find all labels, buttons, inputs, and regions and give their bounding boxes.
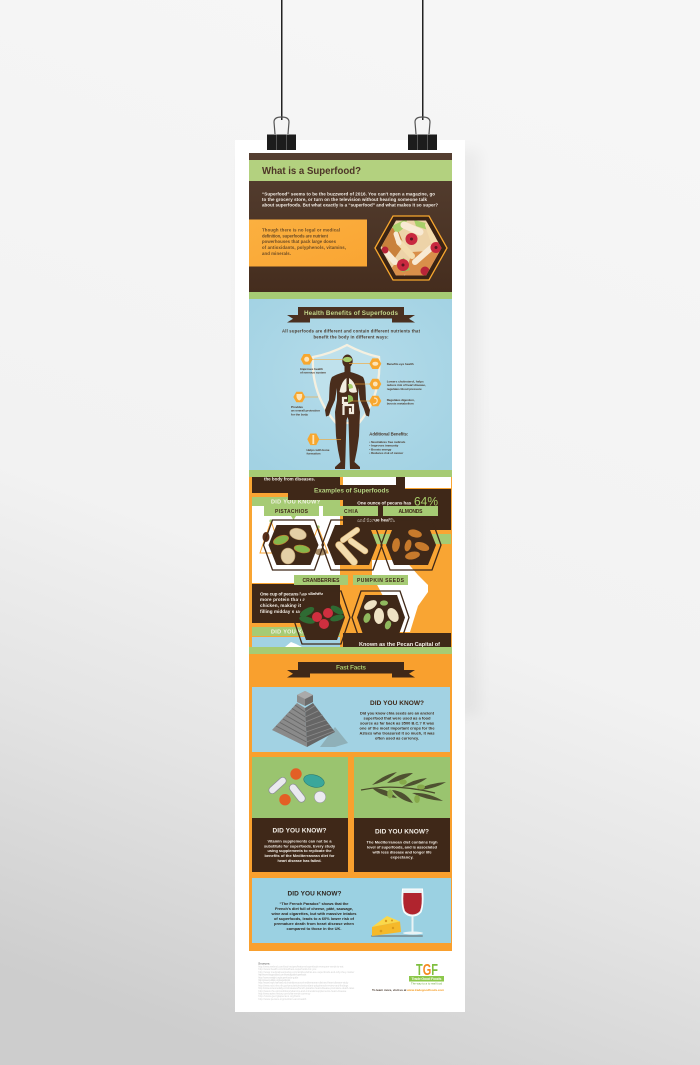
sources list: http://www.sciencedaily.com/releases/french-paradox-heart-disease-premature-death-rates: [258, 987, 355, 990]
card: mediterranean text: DID YOU KNOW?: [375, 828, 429, 836]
fact text: superfood that were used as a food: [364, 716, 431, 720]
binder clip left: [267, 117, 296, 150]
hanging wire left: [281, 0, 282, 120]
fact text: Aztecs who treasured it so much, it was: [360, 730, 434, 736]
card: mediterranean diet: [354, 757, 450, 818]
item: pistachios: [264, 506, 324, 570]
pecan facts text: One ounce of pecans has: [357, 500, 412, 506]
green did you know strips: [252, 497, 451, 647]
sources list: [258, 962, 355, 1001]
card: vitamin text: [252, 818, 348, 872]
brain: [343, 357, 352, 362]
section ribbon: Examples of Superfoods: [314, 488, 389, 494]
title band: [249, 160, 452, 181]
card: mediterranean text: with less disease and longer life: [372, 850, 432, 854]
sources list: http://www.medicalnewstoday.com/articles/what-are-superfoods-and-why-they-matter: [258, 971, 354, 974]
fact text: wine and cigarettes, but with massive intakes: [270, 911, 357, 916]
heading ribbon: Health Benefits of Superfoods: [304, 310, 398, 317]
pecan facts text: more protein than a: [260, 597, 305, 602]
card: vitamin text: heart disease has failed.: [278, 858, 322, 863]
sources list: http://www.eatright.org/superfoods-guide: [258, 976, 299, 979]
additional benefits list: [369, 432, 409, 455]
benefit: eye health: [349, 358, 414, 369]
intestines: [343, 398, 353, 415]
item: cranberries: CRANBERRIES: [302, 578, 340, 584]
additional benefits list: • Boosts energy: [369, 447, 392, 451]
card: chia seeds aztec: [252, 687, 450, 752]
panel: what is a superfood: [249, 153, 452, 292]
card: mediterranean text: [354, 818, 450, 872]
definition callout: Though there is no legal or medical: [262, 228, 340, 232]
card: vitamin text: benefits of the Mediterranean diet for: [264, 853, 335, 858]
logo: trade good foods: Trade Good Foods: [412, 977, 442, 981]
pecan capital block: [343, 633, 451, 648]
human body figure: [325, 354, 370, 469]
benefit: nervous system: [300, 354, 343, 374]
poster sheet: [235, 140, 465, 1012]
card: vitamin text: Vitamin supplements can not be a: [268, 838, 332, 844]
sources list: http://www.hsph.harvard.edu/nutritionsource/mediterranean-diet-and-heart-disease-study: [258, 982, 349, 985]
benefit: cholesterol: Lowers cholesterol, helps: [387, 380, 424, 384]
subheading: benefit the body in different ways:: [314, 334, 388, 340]
lungs: [340, 378, 357, 393]
item: pistachios: PISTACHIOS: [275, 509, 309, 515]
card: vitamin text: using supplements to replicate the: [268, 848, 332, 853]
fact text: compared to those in the UK.: [286, 926, 342, 931]
icon: wine glass and cheese: [371, 889, 423, 937]
benefit: nervous system: of nervous system: [300, 370, 326, 374]
panel: health benefits: [249, 299, 452, 470]
card: vitamin supplements: [252, 757, 348, 818]
card: vitamin text: substitute for superfoods. Every study: [264, 844, 336, 848]
fact text: often used as currency.: [375, 736, 419, 740]
logo: trade good foods: [409, 962, 444, 986]
sources list: http://www.pecans.org/nutrition-and-health: [258, 998, 307, 1001]
item: cranberries: [293, 575, 350, 644]
fact text: Did you know chia seeds are an ancient: [360, 710, 435, 716]
title band: What is a Superfood?: [262, 165, 361, 177]
additional benefits list: Additional Benefits:: [369, 432, 409, 436]
sources list: http://www.webmd.com/food-recipes/features/superfoods-everyone-needs-to-eat: [258, 966, 344, 968]
definition callout: definition, superfoods are nutrient: [262, 234, 329, 238]
panel: examples of superfoods: [249, 476, 452, 648]
scale illustration behind pistachios: [260, 519, 328, 556]
item: chia: [322, 506, 382, 570]
divider band green: [249, 292, 452, 299]
item: almonds: [381, 506, 441, 570]
sources list: http://www.ncbi.nlm.nih.gov/pmc/articles/antioxidant-polyphenols-review-and-findings: [258, 984, 349, 987]
benefit: nervous system: Improves health: [300, 367, 323, 371]
definition callout: powerhouses that pack large doses: [262, 239, 337, 244]
item: almonds: ALMONDS: [398, 509, 423, 515]
divider band green: [249, 647, 452, 654]
pecan facts text: One cup of pecans has slightly: [260, 592, 323, 596]
pecan facts text: 64%: [414, 494, 438, 508]
benefit: overall protection: [291, 392, 320, 416]
definition callout: of antioxidants, polyphenols, vitamins,: [262, 245, 346, 250]
fact text: French's diet full of cheese, pâté, sausage,: [275, 906, 353, 911]
fact text: “The French Paradox” shows that the: [280, 901, 349, 906]
shield outline: [313, 345, 379, 423]
divider band green: [249, 470, 452, 477]
intro text: about superfoods. But what exactly is a “superfood” and what makes it so super?: [262, 202, 438, 208]
sources list: http://www.nhs.uk/conditions/vitamins-and-minerals/supplements-heart-disease: [258, 990, 347, 993]
benefit: overall protection: for the body: [291, 412, 308, 416]
item: chia: CHIA: [344, 509, 358, 515]
fact text: [360, 700, 435, 740]
pecan facts text: [260, 494, 438, 614]
pecan facts text: chicken, making it a: [260, 603, 305, 608]
benefit: digestion: boosts metabolism: [387, 402, 414, 406]
heading ribbon: [287, 662, 415, 678]
green did you know strips: DID YOU KNOW?: [271, 630, 321, 636]
icon: pills: [267, 768, 326, 805]
benefit: bone formation: [306, 434, 341, 456]
binder clip right: [408, 117, 437, 150]
fact text: premature death from heart disease when: [274, 921, 355, 926]
subheading: All superfoods are different and contain different nutrients that: [282, 328, 421, 334]
sources list: http://www.nutrition.org/superfoods: [258, 979, 291, 982]
card: mediterranean text: The Mediterranean diet contains high: [366, 840, 438, 844]
logo: trade good foods: TGF: [416, 962, 438, 979]
definition callout: and minerals.: [262, 251, 291, 256]
additional benefits list: • Neutralizes free radicals: [369, 440, 406, 444]
logo: trade good foods: The way to a to real food: [411, 982, 442, 986]
intro text: to the grocery store, or turn on the television without hearing someone talk: [262, 197, 427, 202]
benefit: cholesterol: reduce risk of heart disease,: [387, 383, 426, 387]
benefit: digestion: Regulates digestion,: [387, 398, 415, 402]
fact text: DID YOU KNOW?: [288, 890, 342, 898]
benefit: digestion: [350, 396, 415, 406]
overlapping brown blocks: [252, 476, 451, 623]
item: pumpkin seeds: [352, 575, 409, 644]
liver and stomach: [348, 384, 353, 389]
subheading: [282, 328, 421, 340]
benefit: cholesterol: regulates blood pressure: [387, 387, 422, 391]
overlapping white blocks: [252, 477, 451, 632]
fact text: of superfoods, leads to a 60% lower risk of: [274, 916, 355, 921]
benefit: bone formation: Helps with bone: [306, 448, 330, 452]
heading ribbon: Fast Facts: [336, 665, 366, 672]
fact text: [270, 890, 357, 931]
panel: fast facts: [249, 654, 452, 951]
fact text: source as far back as 3500 B.C.? It was: [360, 720, 434, 726]
additional benefits list: • Improves immunity: [369, 444, 399, 448]
intro text: [262, 192, 438, 208]
section ribbon: [288, 485, 403, 500]
green did you know strips: DID YOU KNOW?: [271, 499, 321, 505]
pecan capital block: Known as the Pecan Capital of: [359, 642, 440, 648]
item: pumpkin seeds: PUMPKIN SEEDS: [357, 578, 405, 584]
sources list: Sources:: [258, 962, 270, 966]
sources list: http://www.georgiapecans.org/facts: [258, 995, 301, 998]
fact text: one of the most important crops for the: [360, 726, 435, 730]
pecan facts text: and tissue health.: [357, 518, 395, 522]
benefit: overall protection: Provides: [291, 405, 303, 409]
benefit: bone formation: formation: [306, 452, 321, 456]
intro text: “Superfood” seems to be the buzzword of 2016. You can't open a magazine, go: [262, 192, 435, 196]
benefit: overall protection: an overall protection: [291, 409, 320, 413]
card: mediterranean text: expectancy.: [390, 854, 414, 860]
card: french paradox: [252, 878, 451, 943]
icon: olive branch: [361, 772, 446, 803]
additional benefits list: • Reduces risk of cancer: [369, 451, 404, 455]
poster shadow: [240, 150, 480, 715]
pecan facts text: filling midday snack: [260, 609, 305, 614]
fact text: DID YOU KNOW?: [370, 700, 424, 707]
overlapping brown blocks: the body from diseases.: [264, 476, 315, 482]
card: mediterranean text: level of superfoods, and is associated: [367, 844, 438, 850]
sources list: http://www.aztec-history.com/chia-seeds-currency: [258, 992, 311, 996]
definition callout: [249, 220, 367, 266]
benefit: cholesterol: [355, 379, 426, 391]
sources list: http://www.bbcgoodfood.com/howto/guide/superfoods: [258, 974, 307, 977]
sources list: http://www.health.com/food/best-superfoods-for-you: [258, 968, 317, 971]
benefit: eye health: Benefits eye health: [387, 362, 414, 366]
icon: salad hexagon: [375, 216, 447, 280]
hanging wire right: [422, 0, 424, 120]
heading ribbon: [287, 307, 415, 322]
card: vitamin text: DID YOU KNOW?: [272, 828, 327, 834]
learn more link: To learn more, visit us at www.tradegoodfoods.com: [372, 988, 444, 992]
icon: pyramid: [272, 691, 348, 747]
